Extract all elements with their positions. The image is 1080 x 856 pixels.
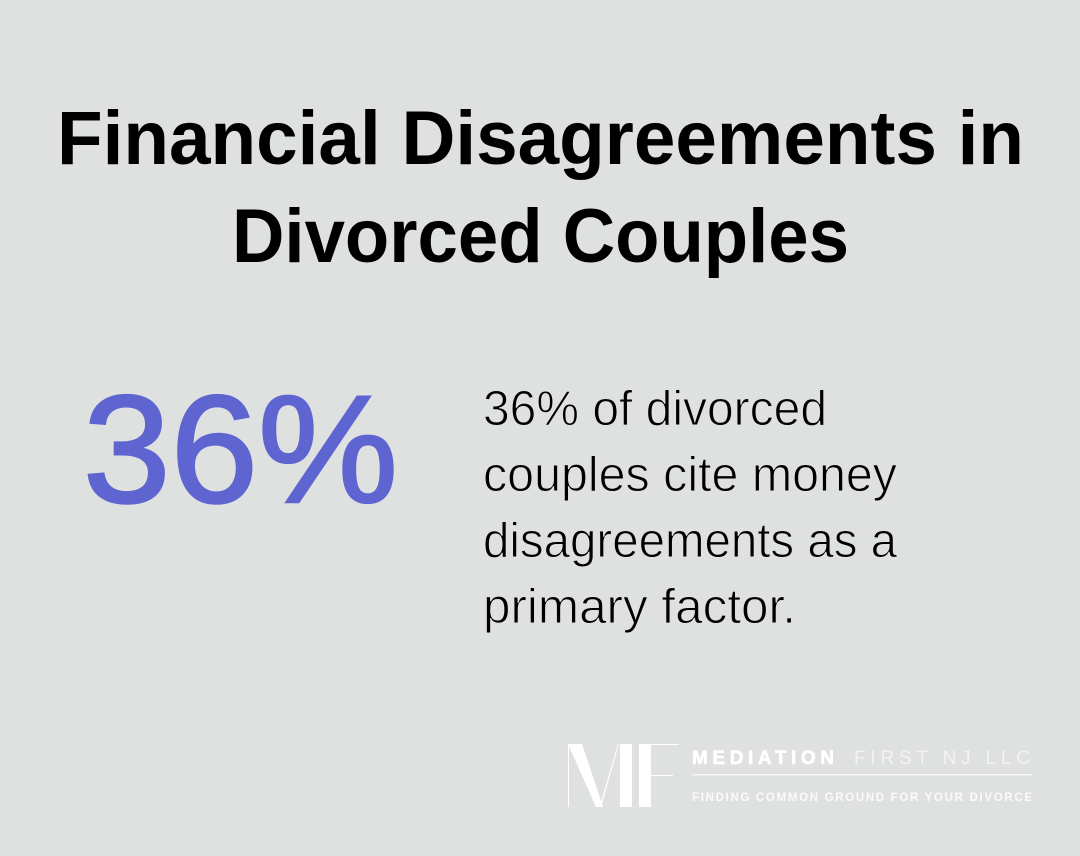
description text: couples cite money <box>483 448 897 502</box>
tagline: FINDING COMMON GROUND FOR YOUR DIVORCE <box>692 792 1032 804</box>
logo: Mediation First NJ LLC <box>568 744 1032 807</box>
description text <box>483 382 898 634</box>
title: Divorced Couples <box>232 194 849 279</box>
company name: FIRST NJ LLC <box>854 748 1030 769</box>
description text: 36% of divorced <box>483 382 827 436</box>
company name <box>692 748 1030 769</box>
description text: disagreements as a <box>483 514 898 568</box>
big statistic: 36% <box>83 364 398 535</box>
title: Financial Disagreements in <box>57 96 1024 181</box>
title <box>57 96 1024 279</box>
description text: primary factor. <box>483 580 796 634</box>
company name: MEDIATION <box>692 748 834 769</box>
icon: MF monogram <box>568 744 679 807</box>
